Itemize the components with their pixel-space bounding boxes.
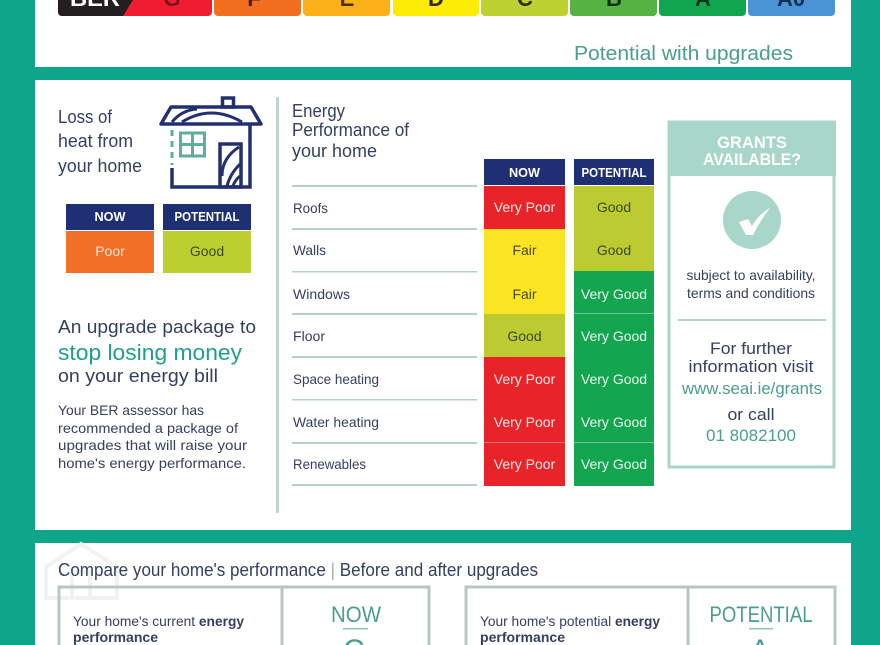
text block: upgrade package: home's energy performance. bbox=[58, 455, 246, 471]
column: potential: Good bbox=[597, 242, 631, 258]
icon: check mark bbox=[723, 191, 781, 249]
grants heading: GRANTS bbox=[717, 134, 787, 152]
card: current performance bbox=[59, 587, 429, 645]
rating A0 bbox=[748, 0, 835, 16]
column: now: Very Poor bbox=[494, 371, 556, 387]
column: now: Good bbox=[507, 328, 542, 344]
table row labels: Floor bbox=[293, 328, 325, 344]
table row labels: Windows bbox=[293, 286, 350, 302]
table row labels: Space heating bbox=[293, 371, 379, 387]
BER label segment bbox=[58, 0, 212, 16]
heading: loss of heat: heat from bbox=[58, 131, 133, 151]
rating: heat loss potential bbox=[163, 204, 251, 273]
text block: upgrade package: upgrades that will raise your bbox=[58, 437, 247, 453]
column: potential: Very Good bbox=[581, 456, 647, 472]
text block: upgrade package: stop losing money bbox=[58, 340, 242, 365]
table row labels: Renewables bbox=[293, 456, 366, 472]
text block: upgrade package: An upgrade package to bbox=[58, 316, 256, 337]
rating A bbox=[659, 0, 746, 16]
card: current performance: Your home's current energy bbox=[73, 613, 244, 629]
grants contact: or call bbox=[728, 405, 774, 424]
heading: loss of heat: Loss of bbox=[58, 107, 113, 127]
heading: energy performance of your home: Energy bbox=[292, 101, 345, 121]
rating: heat loss potential: POTENTIAL bbox=[174, 210, 240, 224]
column: potential: POTENTIAL bbox=[582, 166, 647, 180]
column: now: NOW bbox=[509, 166, 540, 180]
column: potential: Very Good bbox=[581, 371, 647, 387]
column: potential: Very Good bbox=[581, 328, 647, 344]
potential caption: Potential with upgrades bbox=[574, 43, 793, 65]
rating C bbox=[481, 0, 568, 16]
card: current performance: NOW bbox=[331, 602, 381, 627]
column: now: Fair bbox=[512, 242, 537, 258]
grants contact: 01 8082100 bbox=[706, 426, 796, 445]
card: potential performance bbox=[466, 587, 835, 645]
card: current performance: performance bbox=[73, 629, 158, 645]
card: potential performance: Your home's potential energy bbox=[480, 613, 660, 629]
rating: heat loss now: NOW bbox=[94, 210, 126, 224]
grants conditions: terms and conditions bbox=[687, 285, 815, 301]
card: potential performance: performance bbox=[480, 629, 565, 645]
icon: faded house watermark bbox=[46, 544, 117, 598]
rating B bbox=[570, 0, 657, 16]
column: potential bbox=[574, 159, 654, 486]
rating F bbox=[214, 0, 301, 16]
heading: energy performance of your home: Performance of bbox=[292, 120, 410, 140]
text block: upgrade package: on your energy bill bbox=[58, 366, 218, 386]
rating: heat loss now bbox=[66, 204, 154, 273]
panel: grants available bbox=[668, 121, 836, 467]
heading: loss of heat bbox=[58, 107, 142, 176]
icon: house bbox=[161, 98, 261, 187]
grants conditions bbox=[686, 267, 816, 301]
heading: energy performance of your home bbox=[292, 101, 410, 161]
grants heading: AVAILABLE? bbox=[703, 151, 801, 169]
heading: loss of heat: your home bbox=[58, 156, 142, 176]
text block: upgrade package bbox=[58, 316, 256, 471]
heading: energy performance of your home: your home bbox=[292, 141, 377, 161]
table row labels: Water heating bbox=[293, 414, 379, 430]
panel: compare performance bbox=[35, 543, 851, 645]
panel: energy performance bbox=[35, 80, 851, 530]
rating: heat loss now: Poor bbox=[95, 243, 125, 259]
rating: heat loss potential: Good bbox=[190, 243, 224, 259]
compare heading: Compare your home's performance | Before and after upgrades bbox=[58, 560, 538, 580]
panel: BER scale bbox=[35, 0, 851, 67]
column: potential: Very Good bbox=[581, 414, 647, 430]
grants contact: For further bbox=[710, 339, 792, 358]
grants contact: information visit bbox=[688, 357, 814, 376]
text block: upgrade package: Your BER assessor has bbox=[58, 402, 204, 418]
column: now: Very Poor bbox=[494, 414, 556, 430]
rating E bbox=[303, 0, 390, 16]
text block: upgrade package: recommended a package of bbox=[58, 420, 238, 436]
column: now: Fair bbox=[512, 286, 537, 302]
table row labels: Walls bbox=[293, 242, 326, 258]
column: potential: Very Good bbox=[581, 286, 647, 302]
table row labels bbox=[293, 200, 379, 472]
table row labels: Roofs bbox=[293, 200, 328, 216]
rating D bbox=[393, 0, 479, 16]
column: now: Very Poor bbox=[494, 199, 556, 215]
column: now bbox=[484, 159, 565, 486]
grants conditions: subject to availability, bbox=[686, 267, 816, 283]
grants contact: www.seai.ie/grants bbox=[681, 379, 822, 398]
grants heading bbox=[703, 134, 801, 169]
column: now: Very Poor bbox=[494, 456, 556, 472]
card: potential performance: POTENTIAL bbox=[710, 602, 812, 627]
grants contact bbox=[681, 339, 822, 445]
column: potential: Good bbox=[597, 199, 631, 215]
